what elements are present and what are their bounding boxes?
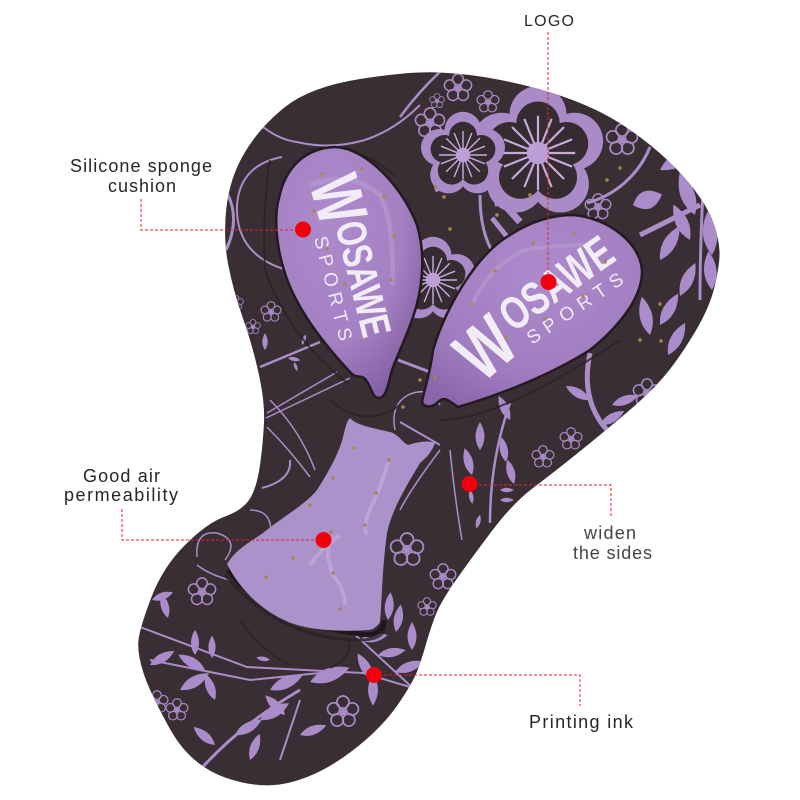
gel sheen [472,245,590,305]
logo wordmark: OSAWE [326,216,400,342]
marker dot [462,476,478,492]
label: Silicone sponge [70,156,212,176]
gel sheen [310,179,392,285]
left silicone cushion [276,147,422,398]
floral print pattern [140,70,719,770]
right silicone cushion [422,215,642,407]
label: the sides [573,543,652,563]
label: Printing ink [529,712,634,732]
label: permeability [64,485,178,505]
label: cushion [108,176,176,196]
callout: silicone sponge cushion [70,156,311,238]
dark rim [228,570,384,635]
leader line [374,675,580,706]
pad body [138,70,720,785]
logo wordmark: OSAWE [489,225,624,341]
quilting creases [225,148,620,668]
cushion shape [227,418,435,631]
leaves [633,190,662,210]
label: Good air [83,466,160,486]
cushion shape [422,215,642,407]
cushion shape [276,147,422,398]
lower silicone cushion [227,418,435,635]
large flowers [473,86,603,213]
marker dot [295,222,311,238]
callout: good air permeability [64,466,332,548]
callout: widen the sides [462,476,652,563]
gel seam [310,462,388,605]
logo subtitle: SPORTS [309,234,355,343]
ventilation holes [264,166,663,611]
logo letter W: W [295,167,382,232]
callout: printing ink [366,667,634,732]
label: widen [583,523,636,543]
logo subtitle: SPORTS [523,269,628,349]
logo letter W: W [439,299,532,396]
marker dot [366,667,382,683]
callout: logo [524,13,574,290]
leader line [122,509,323,540]
leader line [547,32,549,282]
label: LOGO [524,13,574,30]
leader line [469,485,611,516]
pad base shape [138,72,720,785]
marker dot [540,274,556,290]
marker dot [316,532,332,548]
leader line [141,199,303,230]
